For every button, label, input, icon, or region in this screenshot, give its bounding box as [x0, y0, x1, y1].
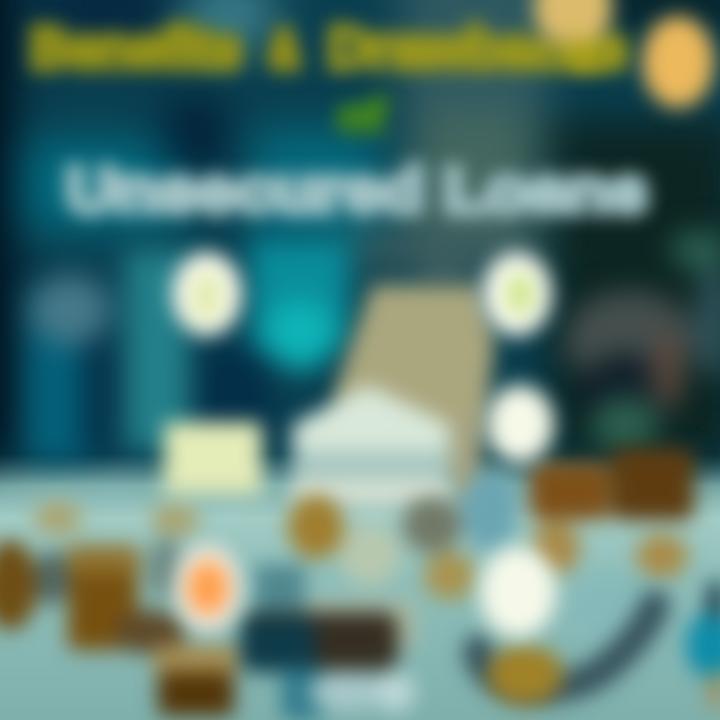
title: Benefits & Drawbacks	[30, 16, 628, 81]
title: Benefits & Drawbacks: Benefits	[30, 16, 242, 81]
illustration: bank building	[292, 385, 450, 506]
dark pen	[478, 605, 655, 688]
icon: glowing circle, lower right	[480, 547, 556, 637]
title: Benefits & Drawbacks: Drawbacks	[328, 16, 628, 81]
illustration: tall document behind the building	[335, 285, 495, 500]
title: of: of	[338, 91, 384, 140]
icon: orange warning circle	[175, 545, 241, 631]
title: Benefits & Drawbacks: &	[268, 17, 300, 80]
glowing sun discs, top right	[534, 0, 714, 108]
bottom-right coin	[487, 645, 563, 705]
icon: pale card, lower left	[164, 422, 262, 494]
icon: glowing circle, benefit top left	[172, 252, 242, 336]
title: Unsecured Loans: Unsecured Loans	[66, 154, 648, 226]
icon: glowing circle, middle right	[486, 385, 554, 463]
icon: glowing circle, top right	[482, 252, 552, 336]
illustration: coin stacks and desk items	[0, 448, 720, 720]
